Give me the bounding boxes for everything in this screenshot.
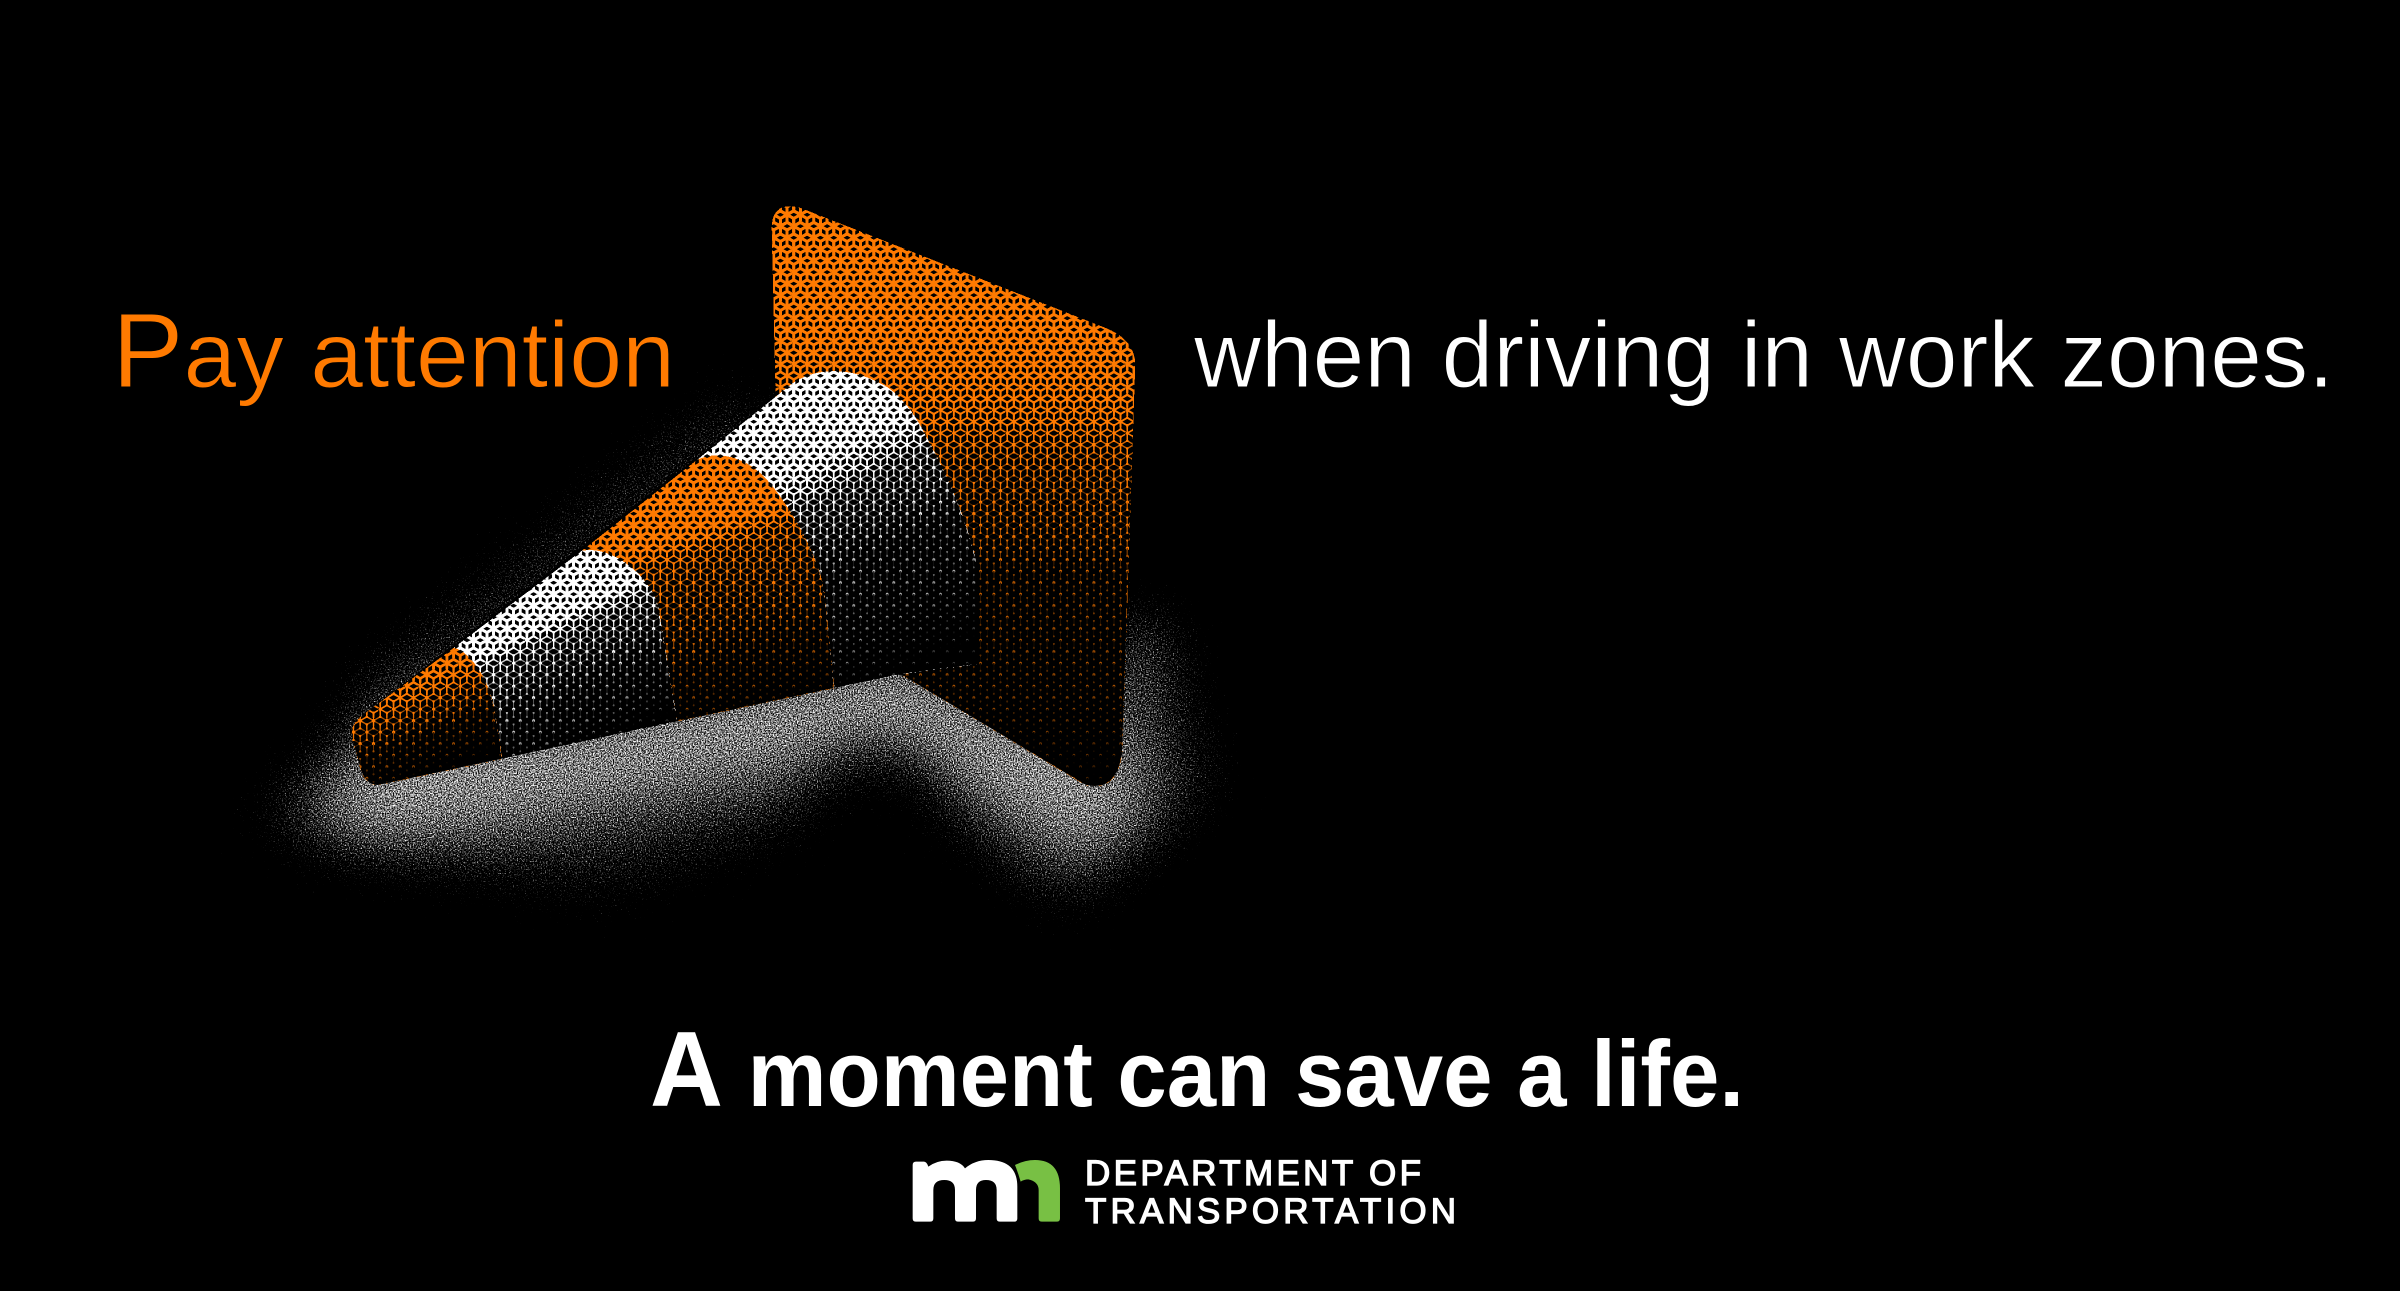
cone band: lower white [454, 550, 677, 759]
cone band: top white [696, 371, 977, 688]
cone backing over sign [696, 371, 977, 700]
silhouette backing [352, 206, 1135, 786]
headline: pay attention: Pay attention [112, 292, 675, 410]
cone band: upper orange [582, 456, 834, 721]
tagline: A moment can save a life. [650, 1009, 1744, 1129]
logo mark: mn [913, 1160, 1060, 1222]
headline: when driving in work zones: when driving in work zones. [1193, 302, 2334, 407]
cone band: orange tip [352, 648, 502, 785]
logo text: department of: DEPARTMENT OF [1085, 1154, 1421, 1193]
road sign panel [772, 206, 1135, 786]
logo: MnDOT [913, 1154, 1456, 1231]
logo text: transportation: TRANSPORTATION [1085, 1192, 1456, 1231]
